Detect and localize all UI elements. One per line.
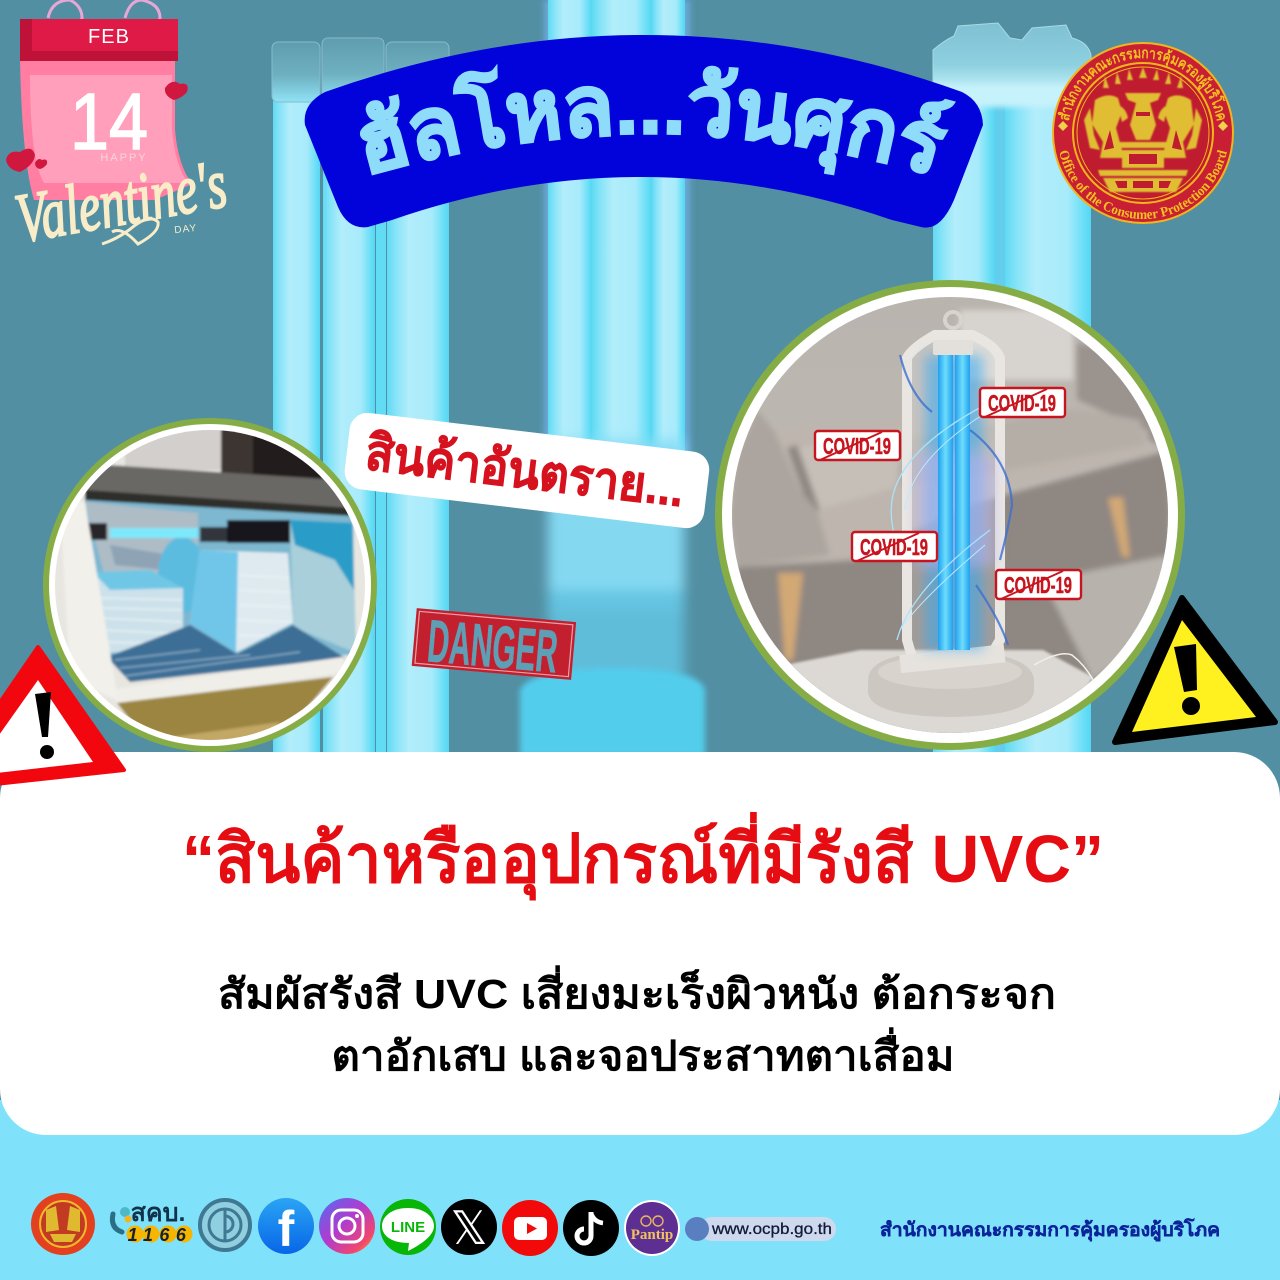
OCPB seal: สำนักงานคณะกรรมการคุ้มครองผู้บริโภค — [1058, 49, 1226, 121]
white content panel — [0, 752, 1280, 1135]
COVID-19 sticker 2: COVID-19 — [823, 433, 891, 459]
product photo: UV lamp in living room — [0, 280, 1280, 1280]
calendar with Valentine's lettering: Valentine's — [10, 146, 232, 258]
COVID-19 sticker 1: COVID-19 — [988, 390, 1056, 416]
background: UV tubes centre — [520, 0, 705, 756]
calendar with Valentine's lettering: 14 — [70, 77, 148, 166]
dangerous product label: สินค้าอันตราย... — [363, 424, 687, 518]
danger stamp — [411, 606, 576, 687]
icon: YouTube — [502, 1200, 558, 1256]
COVID-19 sticker 1 — [980, 388, 1065, 417]
website link pill: www.ocpb.go.th — [711, 1221, 832, 1238]
product photo: UVC cabinet with food containers — [43, 418, 377, 752]
calendar with Valentine's lettering: FEB — [88, 26, 130, 48]
title banner — [304, 35, 983, 228]
calendar with Valentine's lettering: DAY — [174, 223, 198, 236]
hotline logo 1166: สคบ. — [131, 1199, 185, 1227]
calendar with Valentine's lettering — [6, 0, 232, 258]
hotline logo 1166 — [112, 1199, 192, 1245]
description text line 2: ตาอักเสบ และจอประสาทตาเสื่อม — [332, 1027, 954, 1079]
description text line 1: สัมผัสรังสี UVC เสี่ยงมะเร็งผิวหนัง ต้อกระจก — [218, 965, 1056, 1017]
icon: X: 𝕏 — [450, 1202, 488, 1254]
danger stamp: DANGER — [425, 607, 560, 685]
icon: Facebook: f — [278, 1201, 295, 1257]
hotline logo 1166: 1166 — [128, 1225, 192, 1245]
icon: Instagram — [319, 1198, 375, 1254]
COVID-19 sticker 2 — [815, 431, 900, 460]
COVID-19 sticker 4 — [996, 570, 1081, 599]
icon: TikTok — [563, 1200, 619, 1256]
red warning triangle — [0, 647, 124, 790]
COVID-19 sticker 4: COVID-19 — [1004, 572, 1072, 598]
icon: LINE: LINE — [391, 1219, 425, 1236]
COVID-19 sticker 3 — [852, 532, 937, 561]
website link pill — [685, 1217, 836, 1241]
footer seal — [31, 1193, 95, 1255]
COVID-19 sticker 3: COVID-19 — [860, 534, 928, 560]
calendar with Valentine's lettering: HAPPY — [100, 152, 148, 164]
CPE logo — [198, 1198, 252, 1252]
icon: LINE — [380, 1199, 436, 1255]
icon: Pantip — [624, 1200, 680, 1256]
icon: Pantip: Pantip — [631, 1227, 673, 1243]
icon: X — [441, 1199, 497, 1255]
organisation name: สำนักงานคณะกรรมการคุ้มครองผู้บริโภค — [880, 1218, 1220, 1242]
light-blue footer band — [0, 1100, 1280, 1280]
background: UV tubes left — [272, 38, 449, 755]
OCPB seal — [1052, 42, 1234, 224]
background: UV tubes right — [933, 23, 1091, 755]
yellow warning triangle — [1115, 598, 1275, 742]
main heading: “สินค้าหรืออุปกรณ์ที่มีรังสี UVC” — [182, 811, 1104, 901]
icon: Facebook — [258, 1198, 314, 1257]
OCPB seal: Office of the Consumer Protection Board — [1060, 150, 1227, 219]
title banner: ฮัลโหล...วันศุกร์ — [360, 64, 956, 176]
